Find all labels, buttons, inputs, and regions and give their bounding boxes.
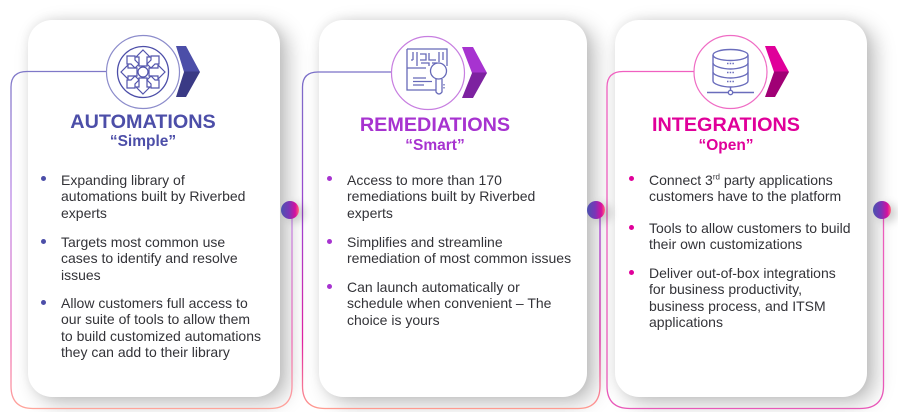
connector dot 2 <box>587 201 605 219</box>
bullets: remediations: remediations built by Riverbed <box>347 188 535 204</box>
subheading: simple: “Simple” <box>110 133 176 150</box>
bullets: automations: Allow customers full access to <box>61 295 248 311</box>
subheading: open: “Open” <box>698 137 754 154</box>
bullets: remediations: Can launch automatically or <box>347 279 520 295</box>
bullets: integrations <box>629 172 851 330</box>
bullets: integrations: Deliver out-of-box integrations <box>649 265 836 281</box>
bullets: remediations: schedule when convenient – The <box>347 295 551 311</box>
bullets: automations: experts <box>61 205 107 221</box>
heading: remediations: REMEDIATIONS <box>360 114 510 136</box>
bullets: automations: issues <box>61 267 101 283</box>
bullets: automations: Targets most common use <box>61 234 225 250</box>
bullets: remediations: Access to more than 170 <box>347 172 502 188</box>
bullets: automations: Expanding library of <box>61 172 185 188</box>
panel: automations card <box>28 20 280 397</box>
connector dot 3 <box>873 201 891 219</box>
bullets: integrations: business process, and ITSM <box>649 298 826 314</box>
bullets: remediations: Simplifies and streamline <box>347 234 503 250</box>
heading: automations: AUTOMATIONS <box>70 111 216 133</box>
bullets: integrations: applications <box>649 314 723 330</box>
bullets: integrations: for business productivity, <box>649 281 802 297</box>
bullets: integrations: Connect 3rd party applications <box>649 172 833 188</box>
bullets: remediations: experts <box>347 205 393 221</box>
bullets: automations <box>41 172 261 360</box>
panel: remediations card <box>319 20 587 397</box>
bullets: automations: cases to identify and resolve <box>61 250 238 266</box>
bullets: automations: they can add to their library <box>61 344 230 360</box>
bullets: remediations: remediation of most common issues <box>347 250 571 266</box>
subheading: smart: “Smart” <box>405 137 465 154</box>
bullets: remediations: choice is yours <box>347 312 440 328</box>
bullets: integrations: their own customizations <box>649 236 802 252</box>
bullets: remediations <box>327 172 571 328</box>
bullets: automations: automations built by Riverbed <box>61 188 245 204</box>
bullets: integrations: Tools to allow customers to build <box>649 220 851 236</box>
bullets: automations: to build customized automations <box>61 328 261 344</box>
panel: integrations card <box>615 20 867 397</box>
connector dot 1 <box>281 201 299 219</box>
bullets: integrations: customers have to the platform <box>649 188 841 204</box>
heading: integrations: INTEGRATIONS <box>652 114 800 136</box>
bullets: automations: our suite of tools to allow them <box>61 311 250 327</box>
